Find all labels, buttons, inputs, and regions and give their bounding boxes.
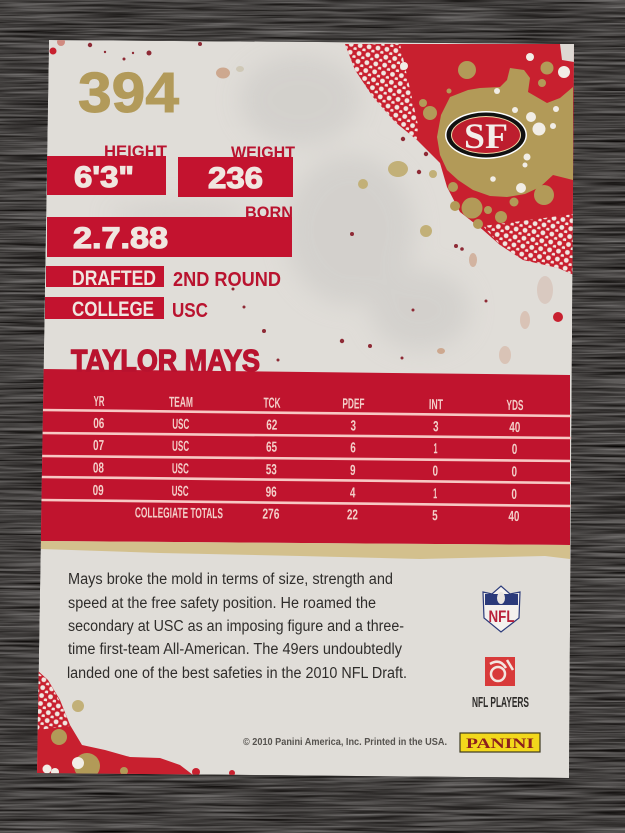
born value: 2.7.88 — [73, 222, 168, 255]
row 06: 3 — [433, 419, 439, 435]
stats table band — [41, 369, 570, 545]
row 09: 0 — [511, 487, 517, 503]
row 07 — [93, 438, 517, 458]
totals row: 40 — [508, 509, 519, 525]
row 08: 9 — [350, 463, 356, 479]
totals row: 22 — [347, 507, 358, 523]
row 07: 07 — [93, 438, 104, 454]
card — [37, 38, 575, 779]
header row — [93, 394, 524, 414]
Panini logo — [460, 733, 540, 752]
height value: 6'3" — [74, 161, 134, 194]
born box — [47, 217, 292, 257]
college label: COLLEGE — [72, 298, 154, 321]
stat: drafted — [46, 266, 281, 291]
team colour corner: bottom left — [37, 670, 235, 779]
row 08: 0 — [433, 464, 438, 480]
player bio text: landed one of the best safeties in the 2010 NFL Draft. — [67, 665, 407, 682]
header row: INT — [429, 397, 443, 413]
totals row: 276 — [262, 507, 280, 523]
player bio text: time first-team All-American. The 49ers undoubtedly — [68, 641, 402, 658]
Panini logo: PANINI — [466, 736, 534, 752]
stat: college — [45, 297, 208, 322]
totals row — [135, 505, 519, 525]
white corner notch — [560, 44, 575, 62]
header row: PDEF — [342, 396, 365, 413]
row 09: 4 — [350, 485, 355, 501]
NFL Players label: NFL PLAYERS — [472, 694, 529, 711]
paint spots — [42, 700, 235, 779]
halftone dots — [345, 44, 418, 140]
player bio text: secondary at USC as an imposing figure and a three- — [68, 618, 404, 635]
row 09: 09 — [93, 483, 104, 499]
player bio text — [67, 571, 407, 682]
row 07: USC — [172, 439, 189, 455]
row 06: 3 — [350, 418, 356, 434]
drafted box — [46, 266, 164, 287]
height label: HEIGHT — [104, 142, 168, 161]
header row: YR — [93, 394, 105, 410]
college box — [45, 297, 164, 319]
row 08 — [93, 460, 517, 480]
row 08: USC — [172, 461, 189, 477]
row 07: 65 — [266, 440, 277, 456]
row 06 — [93, 416, 520, 436]
team colour corner: top right — [345, 44, 575, 275]
row 07: 6 — [350, 440, 356, 456]
born label: BORN — [245, 203, 293, 222]
drafted label: DRAFTED — [72, 267, 156, 290]
stat: height — [47, 142, 168, 195]
weight value: 236 — [208, 162, 263, 195]
player bio text: speed at the free safety position. He roamed the — [68, 595, 376, 612]
weight box — [178, 157, 293, 197]
stat: born — [47, 203, 293, 257]
stat: weight — [178, 143, 296, 197]
player name: TAYLOR MAYS — [71, 343, 260, 378]
halftone dots — [37, 672, 70, 730]
copyright: © 2010 Panini America, Inc. Printed in the USA. — [243, 737, 447, 748]
row 09: 1 — [433, 486, 437, 502]
weight label: WEIGHT — [231, 143, 296, 162]
row 09: 96 — [266, 485, 277, 501]
header row: YDS — [506, 398, 524, 414]
row 09 — [93, 483, 517, 503]
header row: TCK — [263, 396, 281, 412]
paper mottling — [150, 60, 464, 345]
college value: USC — [172, 300, 208, 322]
row 08: 08 — [93, 460, 104, 477]
totals row: 5 — [432, 508, 438, 524]
card number: 394 — [78, 61, 179, 125]
table rules — [41, 410, 571, 506]
totals row: COLLEGIATE TOTALS — [135, 505, 223, 522]
icon: NFL shield: NFL — [488, 607, 514, 626]
icon: NFL Players — [485, 657, 515, 686]
row 06: 62 — [266, 418, 277, 434]
row 06: 40 — [509, 420, 520, 436]
height box — [47, 156, 166, 195]
drafted value: 2ND ROUND — [173, 269, 281, 291]
gold splash — [437, 68, 573, 197]
icon: NFL shield — [483, 586, 520, 632]
header row: TEAM — [169, 395, 193, 411]
row 07: 1 — [433, 441, 438, 457]
player bio text: Mays broke the mold in terms of size, strength and — [68, 571, 393, 588]
row 09: USC — [172, 484, 189, 500]
gold and white paint spots — [358, 53, 570, 237]
red splash — [345, 44, 574, 275]
row 06: USC — [172, 417, 190, 433]
gold strip under table — [41, 541, 570, 559]
row 08: 0 — [512, 464, 517, 480]
49ers logo — [445, 111, 527, 159]
row 06: 06 — [93, 416, 104, 432]
row 08: 53 — [266, 462, 277, 478]
stats table text — [92, 394, 524, 525]
row 07: 0 — [512, 442, 517, 458]
lower halftone dots — [483, 214, 574, 275]
card paper — [37, 40, 574, 778]
paint speckles — [50, 38, 563, 364]
49ers logo: SF — [464, 116, 508, 156]
